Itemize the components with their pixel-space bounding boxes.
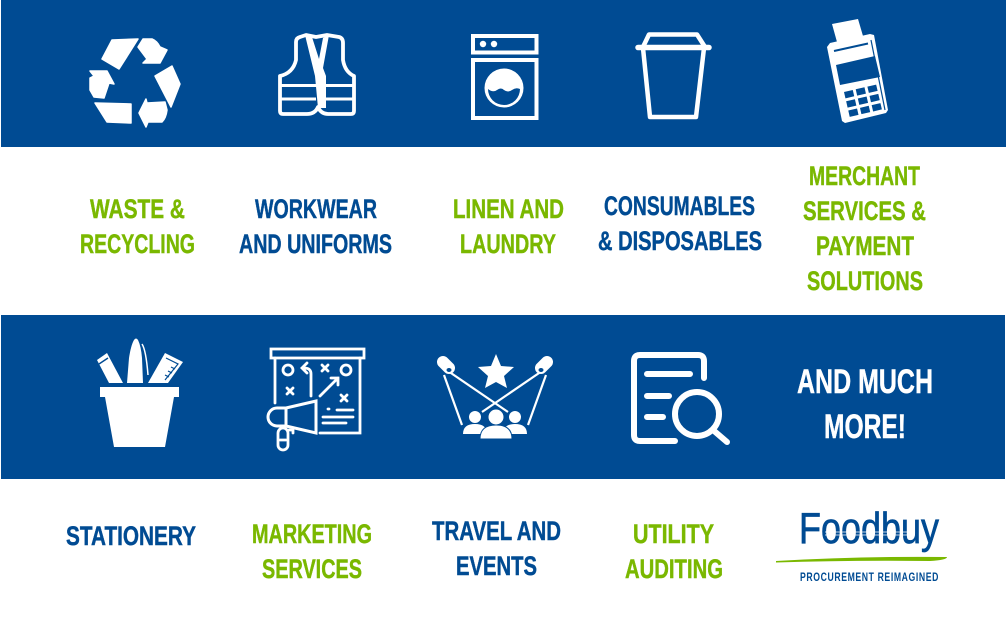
label: and much more: MORE!: [824, 408, 906, 446]
label: utility auditing: UTILITY: [633, 519, 714, 549]
logo: Foodbuy: [776, 504, 947, 584]
icon: events spotlights and audience: [443, 354, 547, 439]
icon: bin: [638, 34, 709, 117]
label: travel and events: EVENTS: [456, 551, 537, 581]
label: consumables and disposables: CONSUMABLES: [604, 191, 755, 221]
label: merchant services and payment solutions: SOLUTIONS: [807, 266, 923, 296]
label: and much more: AND MUCH: [797, 363, 933, 401]
label: marketing services: MARKETING: [252, 519, 372, 549]
label: travel and events: TRAVEL AND: [432, 516, 561, 546]
label: merchant services and payment solutions: MERCHANT: [809, 161, 920, 191]
icon: recycling: [90, 39, 180, 127]
label: workwear and uniforms: AND UNIFORMS: [239, 229, 392, 259]
label: waste and recycling: WASTE &: [90, 194, 185, 224]
middle blue band: [1, 315, 1005, 479]
label: merchant services and payment solutions: PAYMENT: [816, 231, 914, 261]
label: utility auditing: AUDITING: [625, 554, 723, 584]
label: waste and recycling: RECYCLING: [80, 229, 195, 259]
label: merchant services and payment solutions: SERVICES &: [803, 196, 926, 226]
label: workwear and uniforms: WORKWEAR: [255, 194, 377, 224]
top blue band: [1, 0, 1006, 147]
icon: marketing plan and megaphone: [268, 349, 364, 450]
icon: stationery pot: [97, 338, 183, 447]
label: stationery: STATIONERY: [66, 521, 196, 551]
icon: document audit with magnifier: [634, 355, 727, 442]
logo: Foodbuy: PROCUREMENT REIMAGINED: [800, 572, 939, 584]
icon: card payment terminal: [827, 19, 888, 123]
label: marketing services: SERVICES: [262, 554, 362, 584]
label: linen and laundry: LAUNDRY: [460, 229, 556, 259]
label: linen and laundry: LINEN AND: [453, 194, 564, 224]
label: consumables and disposables: & DISPOSABLES: [598, 226, 762, 256]
logo: Foodbuy: Foodbuy: [799, 504, 939, 553]
icon: hi-vis vest: [280, 35, 354, 114]
icon: washing machine: [473, 36, 536, 118]
